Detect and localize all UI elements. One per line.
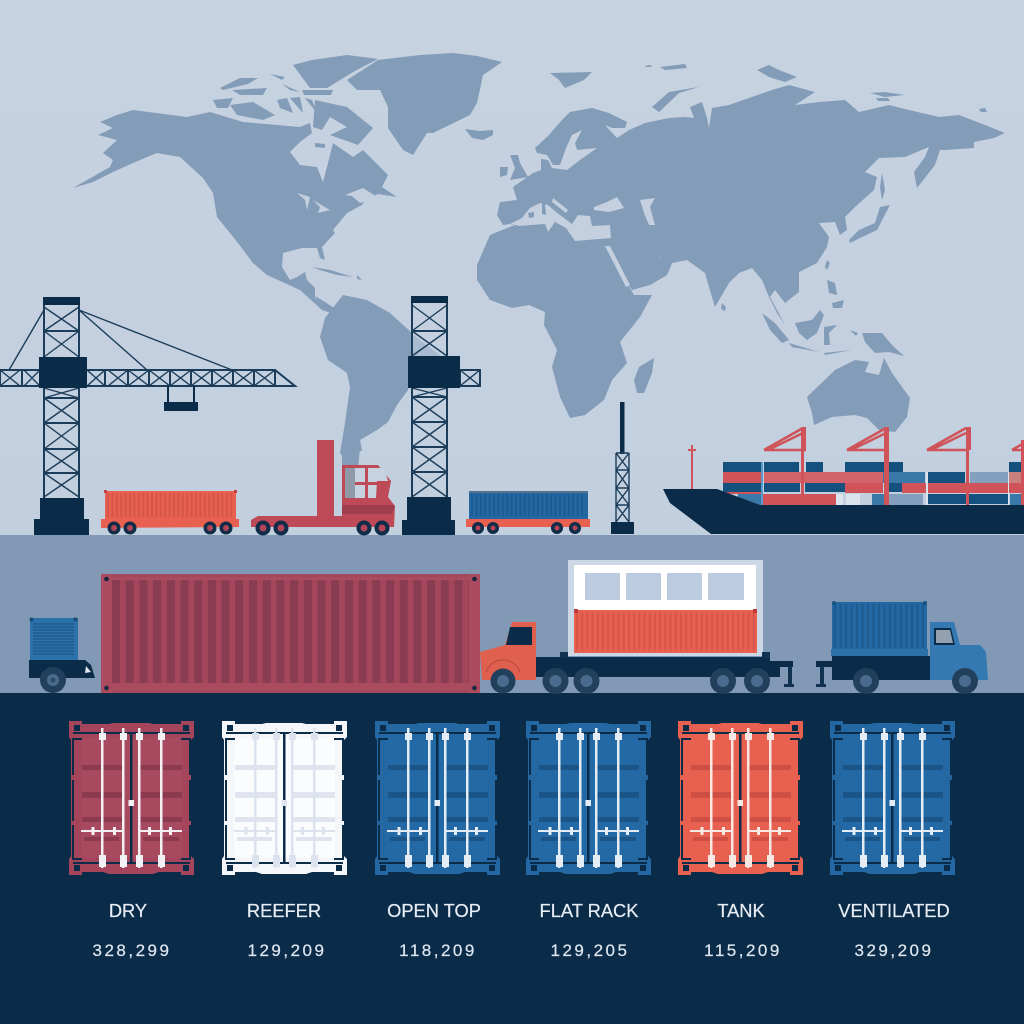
Madagascar (634, 358, 654, 393)
labels and values: reefer: 129,209 (248, 941, 326, 960)
cargo containers (723, 462, 1024, 505)
crane: left (0, 297, 295, 535)
Great Lakes, Gulf of St Lawrence, Gulf of California (238, 188, 377, 267)
Africa (477, 224, 652, 418)
inland seas: Mediterranean, Black Sea, Caspian, Red Sea, Persian Gulf (510, 197, 664, 260)
Red Sea (605, 246, 630, 287)
labels and values: ventilated (838, 900, 950, 960)
world map (73, 53, 1005, 463)
bow mast (688, 445, 696, 489)
Svalbard, Novaya Zemlya, Arctic islands (550, 64, 987, 112)
hook spreader (164, 386, 198, 411)
Arabia (610, 235, 672, 290)
lattice tower (44, 305, 79, 500)
Australia (807, 358, 910, 432)
dark base panel (0, 693, 1024, 1024)
New Guinea (850, 330, 904, 356)
Sri Lanka, Taiwan, Sakhalin, Japan (721, 173, 890, 311)
Greenland (347, 53, 502, 155)
labels and values: dry: 328,299 (93, 941, 171, 960)
container door icon: flat rack (526, 721, 651, 875)
labels and values: reefer: REEFER (247, 900, 321, 921)
signal mast (611, 402, 634, 534)
deck cranes (764, 428, 1024, 450)
container door icon: dry (69, 721, 194, 875)
Mediterranean islands (528, 203, 546, 218)
small coral container on chassis (101, 490, 239, 534)
container ship (663, 427, 1024, 534)
Cuba and Hispaniola (312, 267, 362, 280)
container door icon: ventilated (830, 721, 955, 875)
red tractor with exhaust stack (251, 440, 395, 536)
British Isles (500, 155, 528, 180)
trailer (536, 657, 793, 677)
South America (320, 295, 412, 463)
wheels (490, 668, 770, 694)
labels and values: dry (93, 900, 171, 960)
white housing (568, 560, 763, 656)
Southeast Asia islands (762, 280, 852, 355)
large red container (101, 574, 480, 693)
labels and values: flat rack: FLAT RACK (540, 900, 638, 921)
Central America tail (315, 296, 340, 314)
blue truck with container (816, 601, 988, 694)
cables (9, 310, 232, 370)
labels and values: flat rack: 129,205 (551, 941, 629, 960)
labels and values: flat rack (540, 900, 638, 960)
labels and values: open top: OPEN TOP (387, 900, 481, 921)
labels and values: open top (387, 900, 481, 960)
labels and values: tank: 115,209 (704, 941, 782, 960)
coral truck with white and coral container (480, 560, 794, 694)
coral container (574, 610, 757, 653)
labels and values: tank: TANK (717, 900, 765, 921)
hull (663, 489, 1024, 534)
labels and values: reefer (247, 900, 326, 960)
labels and values: dry: DRY (109, 900, 147, 921)
port ground band (0, 535, 1024, 693)
Eurasia (497, 85, 1005, 325)
container door icon: reefer (222, 721, 347, 875)
labels and values: tank (704, 900, 782, 960)
tower cap, block and base (34, 297, 89, 535)
crane: centre (402, 296, 480, 535)
background sky (0, 0, 1024, 535)
smoke from stack (342, 446, 360, 470)
labels and values: open top: 118,209 (399, 941, 477, 960)
North America (73, 110, 397, 310)
small blue truck (29, 618, 95, 693)
boom (0, 370, 295, 386)
Iceland (465, 129, 493, 140)
container door icon: open top (375, 721, 500, 875)
South America behind crane haze (412, 334, 440, 365)
cab (480, 622, 536, 680)
labels and values: ventilated: 329,209 (855, 941, 933, 960)
container door icon: tank (678, 721, 803, 875)
labels and values: ventilated: VENTILATED (838, 900, 950, 921)
Arctic islands (213, 55, 378, 148)
small blue container on chassis (466, 491, 590, 534)
